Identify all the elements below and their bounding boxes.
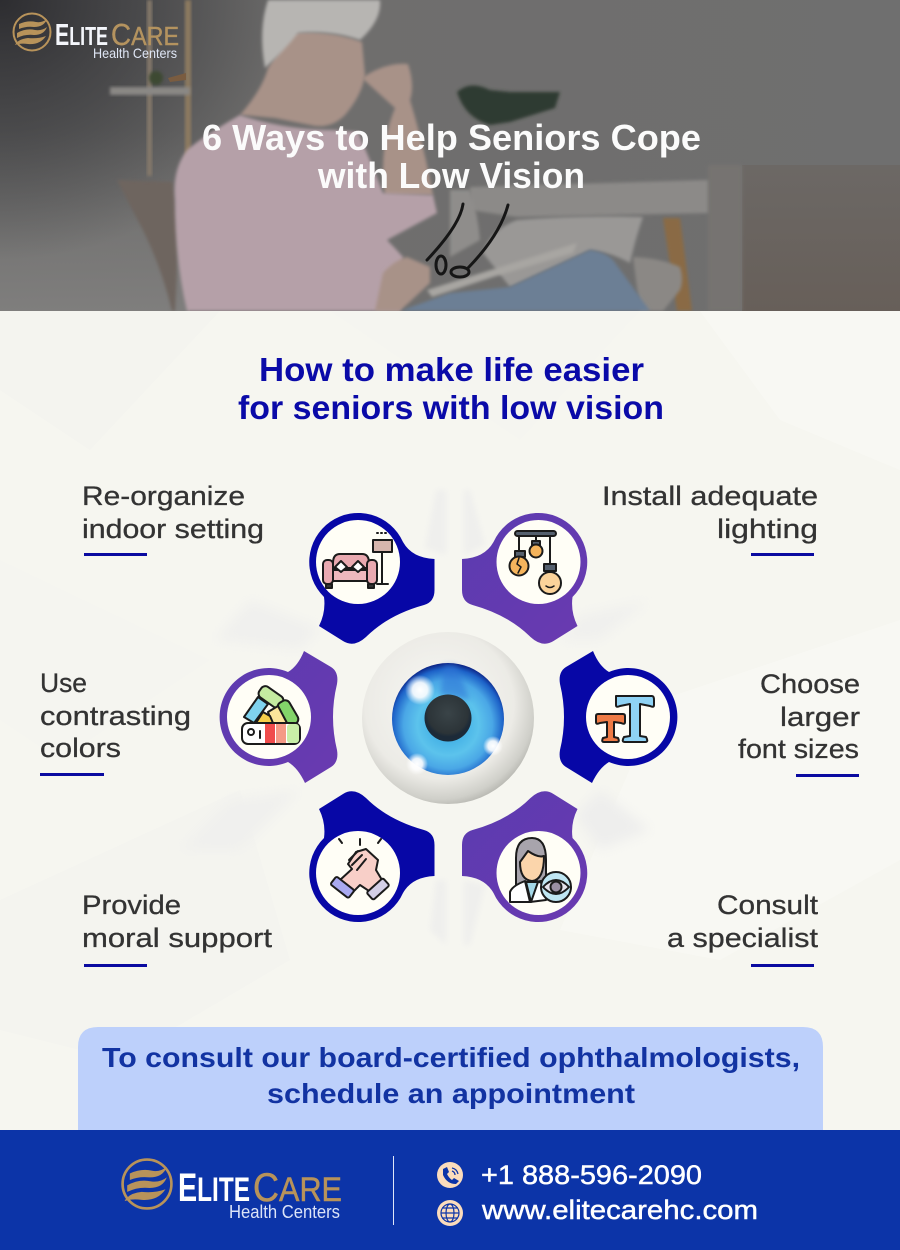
- logo: header: CARE: [111, 17, 179, 52]
- section heading: [238, 351, 664, 426]
- logo: footer: CARE: [253, 1166, 342, 1210]
- label: provide moral support: Provide: [82, 890, 181, 920]
- icon: large and small letter T: [596, 696, 654, 742]
- petal: top-right, bulbs: [462, 513, 587, 644]
- label: choose larger font sizes: Choose: [760, 669, 860, 699]
- call-to-action box: To consult our board-certified ophthalmologists,: [102, 1042, 800, 1073]
- label: use contrasting colors: colors: [40, 733, 121, 763]
- logo: header: ELITE: [55, 17, 108, 52]
- label: consult a specialist: Consult: [717, 890, 819, 920]
- phone number: +1 888-596-2090: [481, 1160, 702, 1190]
- header photo: senior woman rubbing her eyes: [0, 0, 900, 311]
- petal: top-left, sofa: [309, 513, 434, 644]
- label: use contrasting colors: Use: [40, 668, 87, 698]
- label: choose larger font sizes: font sizes: [738, 734, 859, 764]
- icon: sofa and floor lamp: [323, 533, 392, 588]
- section heading: How to make life easier: [259, 351, 644, 388]
- icon: clasped hands: [330, 839, 390, 900]
- label: provide moral support: moral support: [82, 923, 273, 953]
- title: [202, 117, 701, 196]
- label: provide moral support: [82, 890, 273, 967]
- icon: hanging light bulbs: [510, 531, 561, 594]
- label: use contrasting colors: [40, 668, 191, 776]
- page background panel: [0, 311, 900, 1130]
- label: use contrasting colors: contrasting: [40, 701, 191, 731]
- label: install adequate lighting: [602, 481, 818, 556]
- logo: header: [14, 14, 179, 61]
- logo: footer: [123, 1160, 342, 1222]
- logo: footer: Health Centers: [229, 1202, 340, 1222]
- title: with Low Vision: [317, 155, 585, 196]
- logo: header: Health Centers: [93, 45, 177, 61]
- call-to-action box: [78, 1027, 823, 1130]
- label: choose larger font sizes: larger: [780, 702, 860, 732]
- icon: colour palette fan: [242, 684, 300, 744]
- label: consult a specialist: [667, 890, 819, 967]
- label: re-organize indoor setting: indoor setting: [82, 514, 264, 544]
- title: 6 Ways to Help Seniors Cope: [202, 117, 701, 158]
- label: choose larger font sizes: [738, 669, 860, 777]
- logo: footer: ELITE: [178, 1166, 250, 1210]
- icon: doctor with eye lens: [510, 838, 571, 902]
- section heading: for seniors with low vision: [238, 389, 664, 426]
- footer band: [0, 1130, 900, 1250]
- petal: left, colour swatches: [220, 651, 337, 783]
- petal: bottom-right, eye specialist: [462, 791, 587, 922]
- icon: globe: [437, 1200, 463, 1226]
- website: www.elitecarehc.com: [481, 1195, 758, 1225]
- label: re-organize indoor setting: Re-organize: [82, 481, 245, 511]
- petal: bottom-left, handshake: [309, 791, 434, 922]
- icon: phone: [437, 1162, 463, 1188]
- label: consult a specialist: a specialist: [667, 923, 819, 953]
- label: install adequate lighting: lighting: [717, 514, 818, 544]
- call-to-action box: schedule an appointment: [267, 1078, 635, 1109]
- label: re-organize indoor setting: [82, 481, 264, 556]
- label: install adequate lighting: Install adequate: [602, 481, 818, 511]
- central eyeball: [362, 632, 534, 804]
- petal: right, font sizes: [560, 651, 677, 783]
